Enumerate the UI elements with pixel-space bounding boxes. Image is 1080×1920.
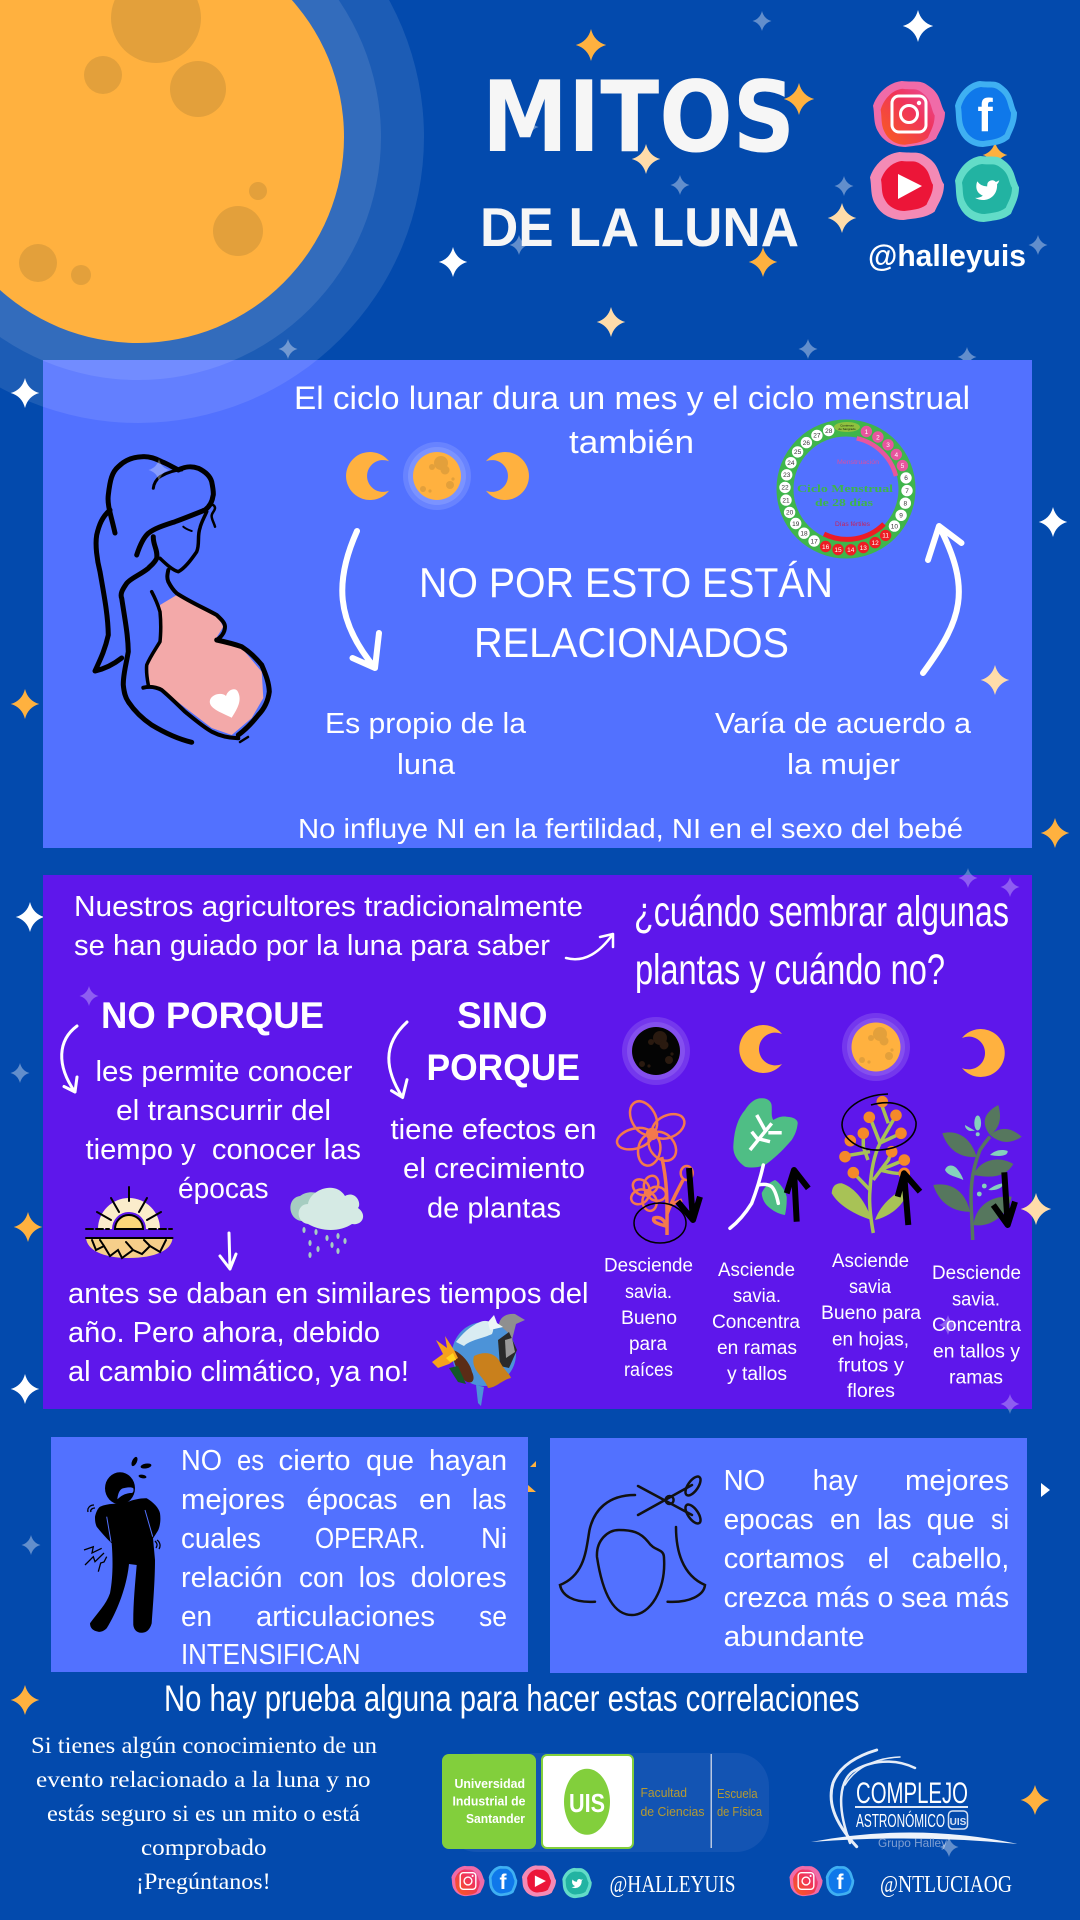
text: operar: en	[181, 1601, 212, 1633]
caption: full moon	[821, 1251, 921, 1402]
moon halo rings	[0, 0, 424, 423]
social row: ntluciaog	[789, 1866, 1012, 1898]
text: operar: los	[359, 1562, 396, 1594]
chart: menstrual cycle wheel: Ciclo Menstrual	[797, 483, 893, 495]
text: cabello: cortamos	[724, 1543, 845, 1575]
column: sino porque: de plantas	[427, 1192, 561, 1224]
chart: menstrual cycle wheel: 1	[865, 429, 869, 436]
social row: ntluciaog: @NTLUCIAOG	[880, 1872, 1012, 1898]
text: varía de acuerdo a la mujer	[715, 708, 972, 781]
text: es propio de la luna	[325, 708, 527, 781]
chart: menstrual cycle wheel: Días fértiles	[835, 521, 871, 528]
arrow: moon cycle down	[342, 531, 379, 668]
heading: no por esto están relacionados: NO POR ESTO ESTÁN	[419, 559, 833, 606]
panel 1 text: lunar cycle statement: El ciclo lunar dura un mes y el ciclo menstrual	[294, 380, 970, 416]
chart: menstrual cycle wheel: 5	[901, 463, 905, 470]
chart: menstrual cycle wheel: 3	[886, 442, 890, 449]
chart: menstrual cycle wheel: 11	[882, 533, 889, 540]
text: cabello: las	[877, 1504, 912, 1536]
heading: no por esto están relacionados: RELACIONADOS	[474, 619, 789, 666]
plant: flower with roots	[615, 1097, 700, 1243]
text: varía de acuerdo a la mujer: la mujer	[787, 749, 900, 781]
text: operar: INTENSIFICAN	[181, 1639, 361, 1671]
chart: menstrual cycle wheel: 14	[847, 547, 855, 554]
caption: waxing moon: y tallos	[727, 1364, 787, 1385]
logo: Universidad Industrial de Santander: Escuela	[717, 1786, 758, 1801]
chart: menstrual cycle wheel: 18	[800, 530, 808, 538]
caption: waning moon: Concentra	[932, 1315, 1021, 1336]
logo: Complejo Astronómico: Grupo Halley	[878, 1836, 947, 1850]
chart: menstrual cycle wheel: 16	[822, 544, 830, 551]
chart: menstrual cycle wheel: 23	[783, 472, 791, 479]
text: operar: cierto	[278, 1445, 350, 1477]
caption: new moon: Desciende	[604, 1256, 693, 1276]
caption: new moon: Bueno	[621, 1308, 677, 1329]
chart: menstrual cycle wheel: 10	[891, 523, 898, 530]
column: no porque	[62, 995, 361, 1205]
caption: waxing moon: en ramas	[717, 1338, 797, 1359]
chart: menstrual cycle wheel: 12	[871, 540, 879, 547]
panel: cabello	[550, 1438, 1027, 1673]
caption: full moon: savia	[849, 1277, 891, 1298]
moon phases row: new, waxing, full, waning	[622, 1013, 1005, 1085]
logo: Complejo Astronómico: ASTRONÓMICO	[856, 1810, 945, 1831]
text: operar: NO	[181, 1445, 222, 1477]
text: pregúntanos: comprobado	[141, 1835, 266, 1860]
text: pregúntanos: evento relacionado a la luna y no	[36, 1767, 370, 1792]
chart: menstrual cycle wheel: 19	[792, 521, 800, 528]
text: operar: OPERAR.	[315, 1523, 426, 1555]
text: es propio de la luna: luna	[397, 749, 456, 781]
text: varía de acuerdo a la mujer: Varía de acuerdo a	[715, 708, 972, 740]
text: cabello: NO	[724, 1465, 765, 1497]
text: cabello: cabello,	[912, 1543, 1009, 1575]
text: pregúntanos	[31, 1733, 378, 1894]
text: pregúntanos: ¡Pregúntanos!	[136, 1869, 271, 1894]
chart: menstrual cycle wheel: Comienzo	[840, 424, 854, 428]
chart: menstrual cycle wheel: 4	[894, 452, 898, 459]
social icons and handle: @halleyuis	[868, 238, 1026, 273]
social row: ntluciaog: f	[836, 1871, 844, 1894]
chart: menstrual cycle wheel	[779, 422, 913, 556]
arrow: sap ascends	[787, 1170, 808, 1222]
heading: no por esto están relacionados	[419, 559, 833, 666]
text: nuestros agricultores	[74, 891, 583, 962]
chart: menstrual cycle wheel: 27	[813, 433, 821, 440]
logo: Complejo Astronómico: COMPLEJO	[856, 1777, 968, 1810]
arrow: sino porque	[389, 1022, 407, 1098]
chart: menstrual cycle wheel: 7	[905, 488, 909, 495]
panel: agriculture background	[43, 875, 1032, 1409]
logo: Complejo Astronómico: UIS	[950, 1817, 967, 1828]
chart: menstrual cycle wheel: 17	[810, 538, 818, 545]
text: es propio de la luna: Es propio de la	[325, 708, 527, 740]
caption: new moon: raíces	[624, 1360, 673, 1381]
chart: menstrual cycle wheel: 22	[781, 485, 789, 492]
logo: Universidad Industrial de Santander: Facultad	[640, 1785, 687, 1800]
arrow: sap ascends	[898, 1173, 920, 1225]
text: cabello: que	[927, 1504, 975, 1536]
icon: rain cloud	[290, 1188, 363, 1258]
text: cabello: crezca más o sea más	[724, 1582, 1009, 1614]
text: operar: relación	[181, 1562, 282, 1594]
icon: hair and scissors	[560, 1474, 705, 1615]
caption: waxing moon: Concentra	[712, 1312, 800, 1333]
text: operar: es	[237, 1445, 264, 1477]
text: operar: se	[479, 1601, 507, 1633]
icon: damaged planet	[432, 1314, 525, 1406]
illustration: big moon	[0, 0, 344, 343]
arrow: to question	[566, 934, 613, 959]
text: pregúntanos: Si tienes algún conocimiento de un	[31, 1733, 378, 1758]
icon: person in pain	[84, 1456, 160, 1633]
panel 1 text: lunar cycle statement	[294, 380, 970, 460]
column: no porque: épocas	[178, 1173, 268, 1205]
social row: halleyuis: f	[500, 1871, 508, 1894]
caption: new moon	[604, 1256, 693, 1381]
heading: cuándo sembrar	[634, 888, 1009, 994]
chart: menstrual cycle wheel: 20	[786, 510, 794, 517]
chart: menstrual cycle wheel: 9	[899, 513, 903, 520]
social row: halleyuis: @HALLEYUIS	[610, 1872, 736, 1898]
chart: menstrual cycle wheel: 8	[903, 500, 907, 508]
logo: Universidad Industrial de Santander	[442, 1753, 769, 1852]
logo: Universidad Industrial de Santander: de Ciencias	[640, 1804, 705, 1819]
text: cabello: en	[830, 1504, 861, 1536]
panel: operar	[51, 1437, 528, 1672]
column: sino porque: tiene efectos en	[390, 1114, 596, 1146]
column: sino porque: SINO	[457, 995, 548, 1036]
column: sino porque: PORQUE	[426, 1047, 580, 1088]
chart: menstrual cycle wheel: 21	[782, 497, 790, 504]
column: no porque: NO PORQUE	[101, 995, 324, 1036]
text: cabello: abundante	[724, 1621, 865, 1653]
text: operar: las	[472, 1484, 506, 1516]
title: MITOS	[482, 61, 795, 175]
column: sino porque: el crecimiento	[403, 1153, 585, 1185]
logo: Universidad Industrial de Santander: de Física	[717, 1804, 763, 1819]
text: cambio climático: antes se daban en similares tiempos del	[68, 1278, 588, 1310]
chart: menstrual cycle wheel: 24	[787, 460, 795, 467]
moon phases: crescent, full, waning	[346, 442, 529, 510]
chart: menstrual cycle wheel: de 28 días	[815, 497, 874, 509]
chart: menstrual cycle wheel: de Sangrado	[838, 427, 856, 431]
text: cambio climático: año. Pero ahora, debido	[68, 1317, 380, 1349]
text: cambio climático	[68, 1278, 588, 1388]
arrow: sap descends	[993, 1172, 1015, 1225]
text: operar: que	[366, 1445, 414, 1477]
text: nuestros agricultores: Nuestros agricultores tradicionalmente	[74, 891, 583, 923]
chart: menstrual cycle wheel: 2	[876, 434, 880, 441]
plant: dark green leaves	[933, 1105, 1022, 1240]
text: cabello	[724, 1465, 1009, 1653]
caption: waning moon: Desciende	[932, 1263, 1021, 1284]
text: operar: dolores	[411, 1562, 507, 1594]
text: nuestros agricultores: se han guiado por la luna para saber	[74, 930, 550, 962]
caption: waning moon: en tallos y	[933, 1342, 1021, 1362]
text: cabello: mejores	[905, 1465, 1009, 1497]
text: operar: épocas	[306, 1484, 398, 1516]
heading: cuándo sembrar: plantas y cuándo no?	[635, 946, 945, 994]
social icons and handle: f	[977, 89, 993, 141]
text: cambio climático: al cambio climático, ya no!	[68, 1356, 409, 1388]
text: operar: mejores	[181, 1484, 285, 1516]
text: operar	[181, 1445, 507, 1671]
text: cabello: si	[991, 1504, 1009, 1536]
caption: waxing moon: Asciende	[718, 1260, 795, 1281]
text: operar: articulaciones	[256, 1601, 435, 1633]
caption: waxing moon: savia.	[733, 1286, 781, 1307]
arrow: menstrual cycle up	[923, 526, 962, 673]
logo: Universidad Industrial de Santander: UIS	[569, 1788, 605, 1818]
caption: full moon: flores	[847, 1381, 895, 1402]
text: operar: hayan	[429, 1445, 507, 1477]
foreground translucent stars	[80, 459, 1020, 1414]
plant: leaves	[730, 1098, 808, 1228]
title	[480, 61, 799, 258]
illustration: pregnant woman	[95, 457, 269, 742]
chart: menstrual cycle wheel: 25	[794, 449, 802, 456]
text: cabello: epocas	[724, 1504, 814, 1536]
panel: lunar and menstrual cycle background	[43, 360, 1032, 848]
caption: full moon: Asciende	[832, 1251, 909, 1272]
social row: halleyuis	[451, 1865, 736, 1898]
caption: waxing moon	[712, 1260, 800, 1385]
text: cabello: el	[868, 1543, 889, 1575]
arrow: down to climate text	[220, 1233, 236, 1269]
plant: berries	[832, 1094, 920, 1233]
caption: waning moon: savia.	[952, 1290, 1000, 1310]
caption: full moon: frutos y	[838, 1356, 905, 1376]
logo: Universidad Industrial de Santander: Santander	[466, 1811, 525, 1826]
text: no influye: No influye NI en la fertilidad, NI en el sexo del bebé	[298, 813, 963, 844]
text: operar: cuales	[181, 1523, 261, 1555]
chart: menstrual cycle wheel: Menstruación	[837, 459, 879, 466]
logo: Universidad Industrial de Santander: Industrial de	[452, 1794, 526, 1809]
chart: menstrual cycle wheel: 6	[904, 475, 908, 482]
chart: menstrual cycle wheel: 13	[860, 545, 867, 552]
caption: new moon: para	[629, 1334, 667, 1355]
logo: Complejo Astronómico	[811, 1750, 1018, 1850]
social icons and handle	[868, 81, 1026, 273]
logo: Universidad Industrial de Santander: Universidad	[454, 1776, 525, 1791]
caption: waning moon	[932, 1263, 1021, 1388]
foreground cream stars	[981, 665, 1051, 1225]
text: cabello: hay	[813, 1465, 858, 1497]
text: operar: Ni	[481, 1523, 507, 1555]
chart: menstrual cycle wheel: 28	[825, 428, 833, 435]
text: operar: en	[419, 1484, 452, 1516]
text: operar: con	[299, 1562, 344, 1594]
chart: menstrual cycle wheel: 26	[803, 440, 810, 447]
arrow: sap descends	[678, 1168, 700, 1220]
column: no porque: tiempo y conocer las	[86, 1134, 361, 1166]
caption: waning moon: ramas	[949, 1368, 1003, 1388]
caption: new moon: savia.	[625, 1282, 672, 1303]
caption: full moon: Bueno para	[821, 1303, 921, 1324]
foreground star over logo	[940, 1837, 958, 1857]
chart: menstrual cycle wheel: 15	[834, 547, 842, 554]
panel 1 text: lunar cycle statement: también	[569, 424, 694, 460]
heading: no hay prueba: No hay prueba alguna para hacer estas correlaciones	[164, 1678, 860, 1719]
icon: drought sun	[86, 1187, 172, 1258]
caption: full moon: en hojas,	[832, 1330, 909, 1350]
arrow: no porque	[62, 1026, 77, 1092]
column: no porque: les permite conocer	[96, 1056, 353, 1088]
column: sino porque	[389, 995, 596, 1224]
title: DE LA LUNA	[480, 196, 799, 258]
text: pregúntanos: estás seguro si es un mito o está	[47, 1801, 360, 1826]
column: no porque: el transcurrir del	[116, 1095, 331, 1127]
